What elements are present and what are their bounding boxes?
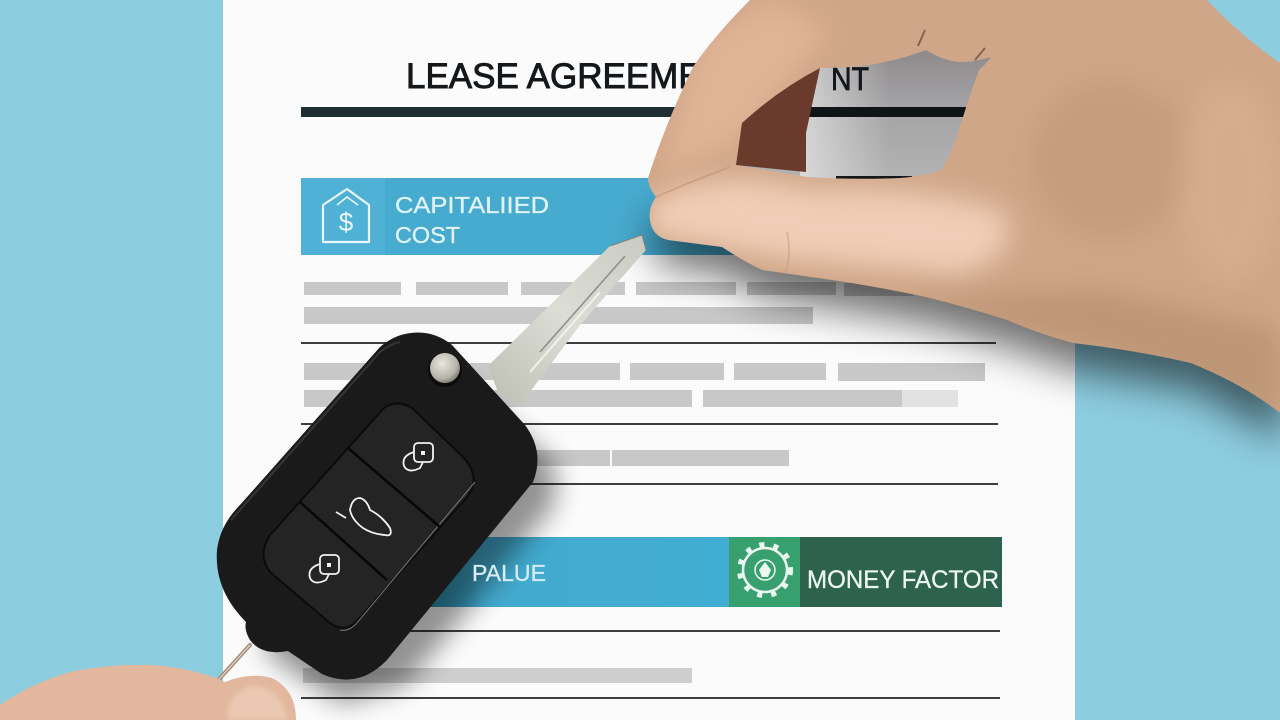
money factor banner: MONEY FACTOR: [807, 566, 999, 594]
money factor banner: [729, 537, 1002, 607]
metal release button: [428, 353, 462, 387]
hand cast shadow: [652, 188, 1280, 441]
capitalized cost banner: [301, 178, 746, 255]
button dividers: [300, 448, 440, 580]
palm shadow: [1042, 92, 1174, 228]
fingertip edge: [656, 167, 730, 197]
shadowed middle finger: [736, 68, 820, 172]
index finger tone: [670, 6, 818, 162]
lease document page: [223, 0, 1075, 720]
residual value banner: [400, 537, 730, 607]
key fob cast shadow: [262, 352, 555, 704]
hand shading: [650, 0, 1280, 420]
thumb crease: [785, 232, 789, 273]
pin held by lower hand: [182, 645, 250, 720]
ruled lines: [301, 342, 1000, 699]
upper right hand pinching the page: [648, 0, 1280, 420]
paper visible through the pinching fingers: [730, 40, 1000, 185]
banner label: COST: [395, 222, 460, 248]
key fob: [217, 333, 538, 680]
icon: lower lock button: [309, 555, 339, 583]
icon: car key blade: [488, 235, 646, 404]
banner label: value: PALUE: [472, 560, 546, 586]
lower edge tone: [947, 288, 1280, 409]
thumb highlight: [650, 180, 1009, 275]
lower left hand: [0, 665, 296, 720]
icon: money wreath: [740, 545, 790, 595]
hand shape: [648, 0, 1280, 413]
icon: car trunk button: [336, 498, 391, 535]
banner label: [395, 192, 549, 248]
fob edge highlight: [231, 342, 400, 520]
icon: upper lock button: [403, 443, 433, 471]
document title: LEASE AGREEME: [406, 57, 702, 96]
fob body: [217, 333, 538, 680]
title rule: [301, 107, 968, 117]
button panel: [264, 404, 474, 628]
paper visible through the pinching fingers: NT: [831, 61, 869, 97]
icon: price tag house with dollar: [323, 189, 369, 242]
banner label: CAPITALIIED: [395, 192, 549, 218]
text placeholder lines: [303, 282, 985, 683]
knuckle crease: [918, 30, 985, 60]
back of hand light: [1198, 152, 1204, 185]
icon: price tag house with dollar: $: [339, 207, 354, 237]
panel edge highlight: [340, 482, 475, 630]
